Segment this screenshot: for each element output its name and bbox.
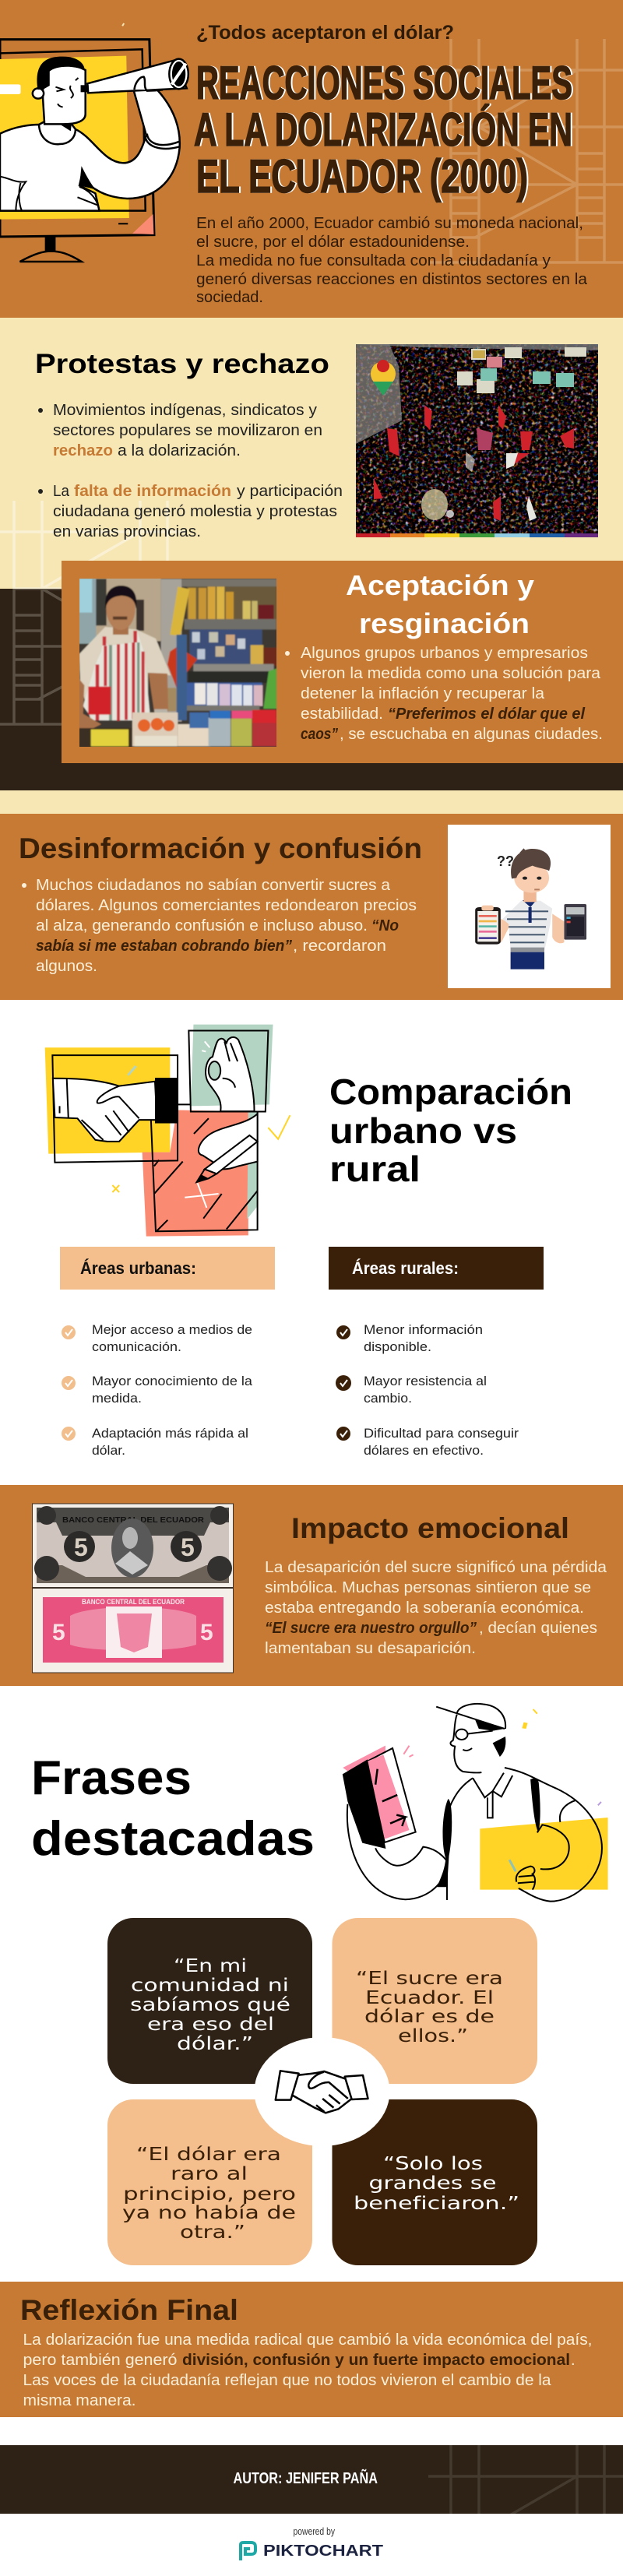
paragraph: reflexión <box>23 2331 592 2409</box>
paragraph: reflexión: Las voces de la ciudadanía reflejan que no todos vivieron el cambio de la <box>23 2372 551 2389</box>
panel: frases destacadas <box>0 1686 623 2282</box>
heading: desinformación: Desinformación y confusión <box>19 832 422 864</box>
quote card 3: ya no había de <box>122 2203 296 2223</box>
panel: impacto emocional <box>0 1485 623 1686</box>
bullet text: desinformación: Muchos ciudadanos no sabían convertir sucres a <box>36 877 391 894</box>
intro paragraph <box>196 215 588 306</box>
bullet text: desinformación: sabía si me estaban cobrando bien” <box>36 938 292 955</box>
list: rural items: Menor información <box>364 1322 483 1337</box>
bullet list: protestas: en varias provincias. <box>53 523 201 540</box>
heading: protestas: Protestas y rechazo <box>35 349 329 379</box>
bullet list: protestas <box>38 402 343 540</box>
quote card 3: otra.” <box>180 2222 245 2243</box>
list: rural items: dólares en efectivo. <box>364 1443 484 1458</box>
quote card 4: “Solo los <box>383 2154 483 2174</box>
bullet text: aceptación: “Preferimos el dólar que el <box>388 706 585 723</box>
quote card 4 <box>332 2099 537 2265</box>
column header: áreas rurales: Áreas rurales: <box>352 1258 459 1278</box>
list: urban items: medida. <box>92 1391 142 1406</box>
image: shopkeeper in a store <box>78 576 280 753</box>
bullet text: aceptación: caos” <box>301 726 338 743</box>
panel: author footer <box>0 2445 623 2514</box>
image: sucre banknotes: BANCO CENTRAL DEL ECUADOR <box>82 1598 185 1606</box>
paragraph: reflexión: pero también generó <box>23 2352 178 2369</box>
list: urban items: Adaptación más rápida al <box>92 1426 248 1441</box>
brand: powered by piktochart <box>241 2525 383 2560</box>
list: rural items <box>336 1322 519 1458</box>
image: sucre banknotes: 5 <box>181 1533 195 1561</box>
confused question marks: ?? <box>497 853 514 869</box>
image: sucre banknotes: 5 <box>200 1620 213 1645</box>
heading: frases: destacadas <box>31 1812 315 1866</box>
list: rural items: cambio. <box>364 1391 412 1406</box>
bullet text: desinformación: dólares. Algunos comerciantes redondearon precios <box>36 897 417 914</box>
bullet text: aceptación: Algunos grupos urbanos y empresarios <box>301 645 588 662</box>
list: rural items: Dificultad para conseguir <box>364 1426 519 1441</box>
list: urban items: Mejor acceso a medios de <box>92 1322 252 1337</box>
bullet text: aceptación: vieron la medida como una solución para <box>301 665 601 682</box>
image: sucre banknotes: BANCO CENTRAL DEL ECUADOR <box>62 1516 205 1525</box>
list: urban items: comunicación. <box>92 1339 181 1354</box>
brand: powered by piktochart: PIKTOCHART <box>263 2543 383 2560</box>
main title <box>194 57 572 202</box>
subtitle question: ¿Todos aceptaron el dólar? <box>196 22 454 44</box>
quote card 1: sabíamos qué <box>130 1995 290 2015</box>
quote card 1 <box>107 1918 312 2084</box>
quote card 2 <box>332 1918 537 2084</box>
author credit: AUTOR: JENIFER PAÑA <box>234 2469 378 2487</box>
heading: frases <box>31 1751 315 1866</box>
heading: aceptación: resginación <box>359 607 530 639</box>
paragraph: impacto: “El sucre era nuestro orgullo” <box>265 1620 477 1637</box>
paragraph: impacto <box>265 1559 607 1657</box>
heading: comparación: rural <box>329 1149 421 1189</box>
bullet list: protestas: y participación <box>237 483 343 500</box>
image: sucre banknotes: 5 <box>74 1533 88 1561</box>
bullet list: protestas: ciudadana generó molestia y protestas <box>53 503 337 520</box>
panel: aceptación y resignación <box>62 561 623 763</box>
quote card 3: “El dólar era <box>136 2145 281 2165</box>
bullet text: desinformación <box>22 877 417 975</box>
quote card 4: grandes se <box>369 2173 497 2194</box>
bullet text: desinformación: algunos. <box>36 958 97 975</box>
column header: áreas urbanas: Áreas urbanas: <box>80 1258 196 1278</box>
illustration: man reading a book <box>343 1704 608 1902</box>
bullet list: protestas: sectores populares se movilizaron en <box>53 422 322 439</box>
bullet text: desinformación: “No <box>371 917 399 934</box>
list: urban items: Mayor conocimiento de la <box>92 1374 253 1388</box>
paragraph: reflexión: misma manera. <box>23 2392 136 2409</box>
quote card 1: era eso del <box>147 2015 274 2035</box>
heading: comparación <box>329 1072 572 1189</box>
intro paragraph: sociedad. <box>196 289 263 306</box>
quote card 2: dólar es de <box>364 2007 495 2027</box>
paragraph: impacto: lamentaban su desaparición. <box>265 1640 476 1657</box>
panel: hero header <box>0 0 623 318</box>
quote card 3: principio, pero <box>123 2184 296 2205</box>
illustration: handshake, ok gesture, and hand writing <box>45 1025 290 1237</box>
paragraph: impacto: simbólica. Muchas personas sintieron que se <box>265 1579 591 1596</box>
quote card 4: beneficiaron.” <box>354 2194 519 2214</box>
bullet list: protestas: a la dolarización. <box>118 442 241 459</box>
brand: powered by piktochart: powered by <box>293 2525 335 2537</box>
quote card 1: comunidad ni <box>131 1976 289 1996</box>
image: sucre banknotes: 5 <box>52 1620 65 1645</box>
bullet text: aceptación: detener la inflación y recuperar la <box>301 685 545 702</box>
paragraph: reflexión: . <box>571 2352 575 2369</box>
panel: reflexión final <box>0 2282 623 2417</box>
column header: áreas rurales <box>329 1247 544 1290</box>
quote card 1: “En mi <box>174 1956 247 1976</box>
intro paragraph: generó diversas reacciones en distintos sectores en la <box>196 271 588 288</box>
bullet list: protestas: falta de información <box>74 483 231 500</box>
quote card 3: raro al <box>171 2164 248 2184</box>
paragraph: impacto: estaba entregando la soberanía económica. <box>265 1599 584 1617</box>
panel: desinformación y confusión <box>0 814 623 1000</box>
panel: protests and acceptance <box>0 318 623 814</box>
panel: comparación urbano vs rural <box>0 1000 623 1485</box>
list: urban items: dólar. <box>92 1443 125 1458</box>
list: rural items: Mayor resistencia al <box>364 1374 487 1388</box>
column header: áreas urbanas <box>60 1247 275 1290</box>
intro paragraph: En el año 2000, Ecuador cambió su moneda nacional, <box>196 215 583 232</box>
list: urban items <box>62 1322 253 1458</box>
quote card 1: dólar.” <box>177 2034 253 2054</box>
heading: reflexión: Reflexión Final <box>20 2294 238 2326</box>
illustration: man with telescope in a monitor <box>0 23 188 262</box>
image: sucre banknotes <box>33 1504 234 1673</box>
quote card 3 <box>107 2099 312 2265</box>
paragraph: impacto: La desaparición del sucre significó una pérdida <box>265 1559 607 1576</box>
bullet list: protestas: Movimientos indígenas, sindicatos y <box>53 402 317 419</box>
bullet text: desinformación: al alza, generando confusión e incluso abuso. <box>36 917 368 934</box>
quote card 2: Ecuador. El <box>365 1988 494 2008</box>
intro paragraph: La medida no fue consultada con la ciudadanía y <box>196 252 551 269</box>
icon: central handshake <box>254 2037 389 2146</box>
paragraph: impacto: , decían quienes <box>479 1620 597 1637</box>
bullet text: aceptación: , se escuchaba en algunas ciudades. <box>340 726 603 743</box>
quote card 2: “El sucre era <box>356 1969 503 1989</box>
bullet list: protestas: rechazo <box>53 442 113 459</box>
bullet text: aceptación: estabilidad. <box>301 706 383 723</box>
bullet text: aceptación <box>285 645 603 743</box>
bullet text: desinformación: , recordaron <box>293 938 386 955</box>
heading: aceptación <box>346 569 534 639</box>
heading: aceptación: Aceptación y <box>346 569 534 601</box>
image: crowd protest <box>356 344 598 537</box>
quote card 2: ellos.” <box>398 2026 468 2046</box>
list: rural items: disponible. <box>364 1339 431 1354</box>
intro paragraph: el sucre, por el dólar estadounidense. <box>196 234 470 251</box>
paragraph: reflexión: La dolarización fue una medida radical que cambió la vida económica del país, <box>23 2331 592 2349</box>
heading: comparación: urbano vs <box>329 1110 517 1151</box>
heading: impacto: Impacto emocional <box>291 1512 569 1544</box>
image card: confused man with abacus and calculator <box>448 825 611 988</box>
paragraph: reflexión: división, confusión y un fuerte impacto emocional <box>182 2352 570 2369</box>
bullet list: protestas: La <box>53 483 70 500</box>
heading: comparación: Comparación <box>329 1072 572 1112</box>
heading: frases: Frases <box>31 1751 192 1805</box>
